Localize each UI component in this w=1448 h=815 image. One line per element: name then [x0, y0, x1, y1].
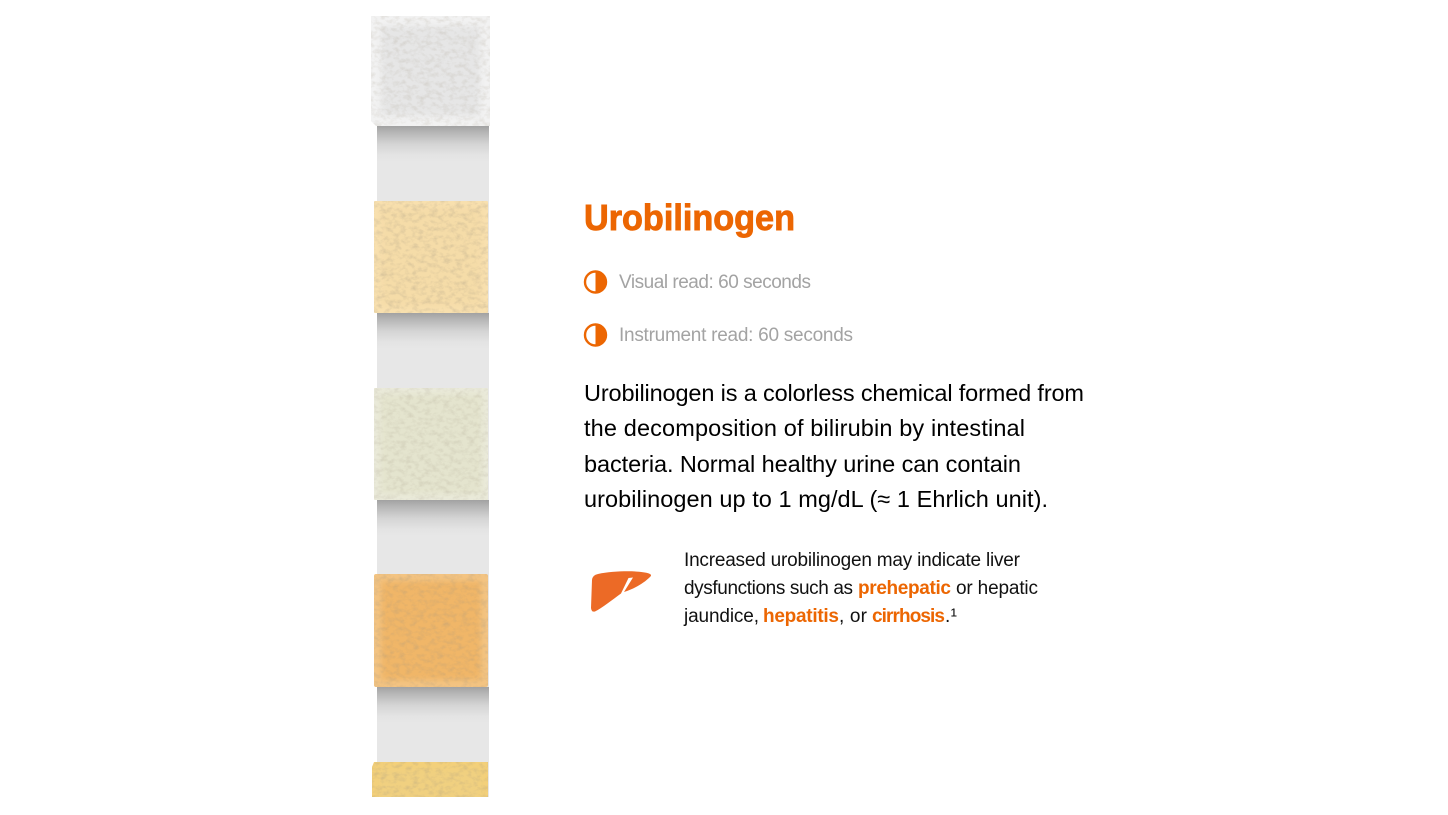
- description paragraph: the decomposition of bilirubin by intestinal: [584, 415, 1025, 441]
- clinical note: jaundice,: [683, 606, 759, 627]
- instrument read text: Instrument read: 60 seconds: [619, 325, 853, 346]
- icon: liver: [591, 571, 651, 612]
- pad: pale yellow: [374, 201, 488, 313]
- clinical note: prehepatic: [858, 578, 951, 599]
- test strip: [371, 16, 490, 803]
- pad shadow 4: [377, 687, 489, 723]
- instrument read row: [585, 324, 853, 346]
- visual read text: Visual read: 60 seconds: [619, 272, 811, 293]
- visual read row: [585, 272, 811, 293]
- clinical note: .¹: [945, 606, 957, 627]
- pad: yellow: [372, 762, 488, 797]
- icon: half circle timer: [585, 272, 606, 292]
- clinical note: [683, 550, 1038, 627]
- strip backing: [377, 126, 489, 797]
- description paragraph: urobilinogen up to 1 mg/dL (≈ 1 Ehrlich unit).: [584, 486, 1048, 512]
- clinical note: dysfunctions such as: [684, 578, 853, 599]
- pad shadow 3: [377, 500, 489, 536]
- clinical note: , or: [839, 606, 868, 627]
- title: Urobilinogen: [584, 197, 795, 238]
- description paragraph: [584, 380, 1084, 512]
- clinical note: Increased urobilinogen may indicate liver: [684, 550, 1021, 571]
- clinical note: or hepatic: [956, 578, 1038, 599]
- pad shadow 2: [377, 313, 489, 349]
- pad: pale green: [374, 388, 488, 500]
- pad shadow 1: [377, 126, 489, 162]
- clinical note: hepatitis: [763, 606, 839, 627]
- pad: orange: [374, 574, 488, 687]
- pad: white: [371, 16, 490, 126]
- description paragraph: bacteria. Normal healthy urine can contain: [584, 451, 1021, 477]
- description paragraph: Urobilinogen is a colorless chemical formed from: [584, 380, 1084, 406]
- icon: half circle timer: [585, 324, 606, 346]
- clinical note: cirrhosis: [872, 606, 945, 627]
